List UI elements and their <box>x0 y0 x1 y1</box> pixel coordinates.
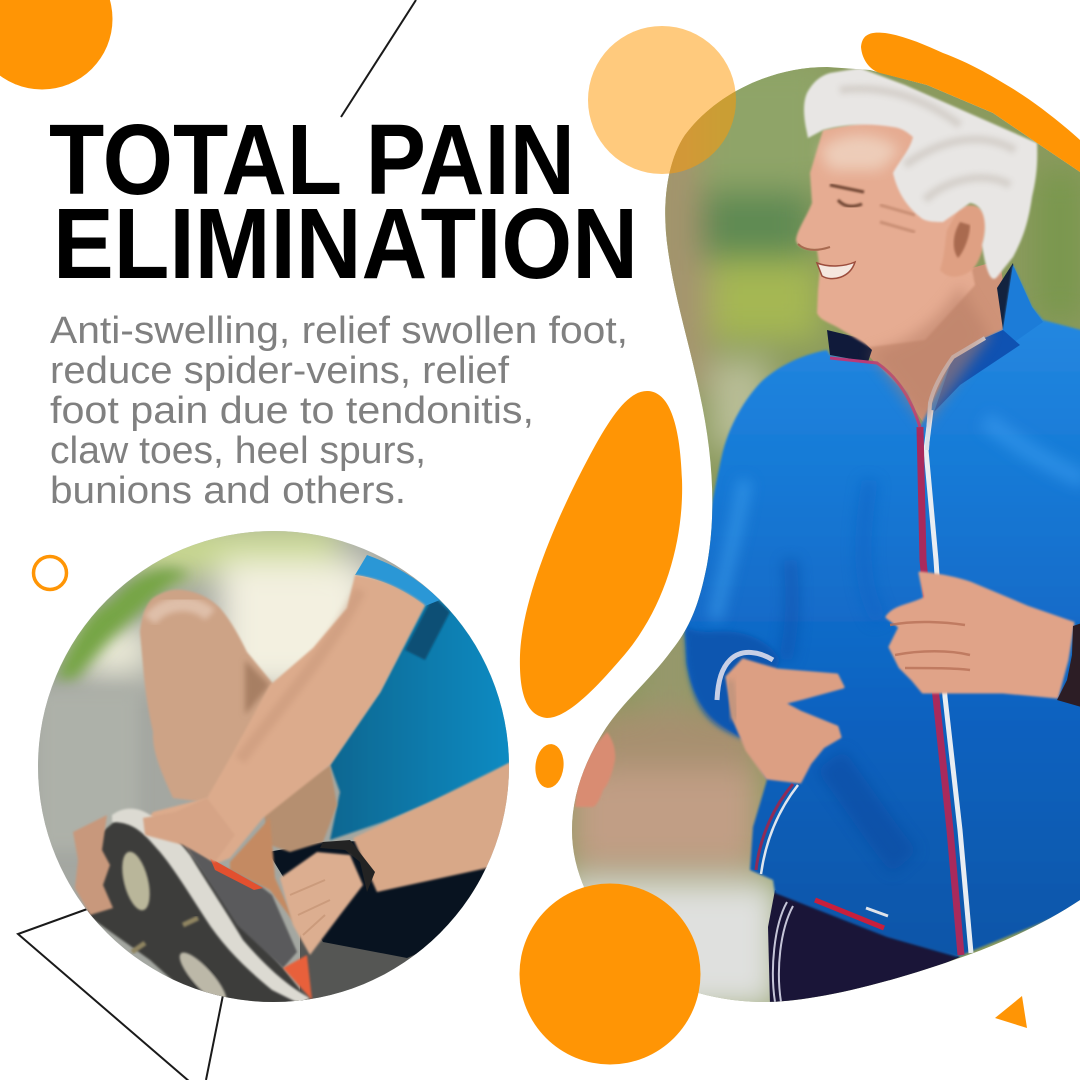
photo: smiling senior man jogging in blue jacket <box>560 50 1080 1010</box>
translucent peach circle <box>588 26 736 174</box>
title: TOTAL PAIN <box>49 104 575 216</box>
small ring <box>34 556 66 590</box>
sole lozenges <box>120 850 152 912</box>
white midsole <box>112 809 310 1004</box>
decorative orange circle top-left <box>0 0 112 90</box>
forearm <box>143 575 425 866</box>
neck <box>866 264 1003 422</box>
far hand <box>575 732 615 807</box>
shoe sole <box>87 817 312 1005</box>
jacket collar <box>946 265 1043 376</box>
body text: foot pain due to tendonitis, <box>50 390 534 432</box>
ankle <box>229 820 292 920</box>
body text: claw toes, heel spurs, <box>50 430 426 472</box>
watch <box>1057 622 1080 708</box>
left dark collar <box>827 330 872 362</box>
near hand <box>727 660 843 782</box>
jacket shadow folds <box>715 420 1080 862</box>
body text: reduce spider-veins, relief <box>50 350 509 392</box>
hand gripping ankle <box>280 852 363 955</box>
shoe side upper <box>183 842 297 968</box>
jacket body <box>685 265 1080 957</box>
eyes and brow <box>830 185 864 206</box>
small orange drop <box>533 743 566 789</box>
large orange drop <box>520 391 682 718</box>
inner dark collar right <box>997 263 1014 330</box>
body text <box>50 310 628 512</box>
jacket zipper <box>926 410 971 953</box>
hem stripes <box>756 784 793 870</box>
decorative thin line top <box>341 0 416 117</box>
sleeve <box>355 555 440 606</box>
head <box>796 115 975 347</box>
small orange triangle <box>995 996 1027 1028</box>
white hair <box>804 68 1037 279</box>
upper thigh leg <box>139 588 273 801</box>
red accents <box>210 858 263 890</box>
title <box>49 104 638 300</box>
decorative triangle outline bottom-left <box>18 908 223 1080</box>
body text: bunions and others. <box>50 470 406 512</box>
sleeve cuff <box>717 652 773 700</box>
raised hand <box>887 573 1073 697</box>
cheek shadow <box>870 285 990 425</box>
hand behind sole <box>73 815 113 915</box>
ear <box>940 205 987 277</box>
lower sleeve <box>685 627 780 738</box>
blurred park background <box>560 60 1080 1010</box>
photo: runner holding injured foot <box>30 520 520 1010</box>
orange swoosh top right <box>861 33 1080 172</box>
smile <box>817 262 855 279</box>
dark shorts <box>268 840 490 958</box>
right arm <box>353 760 515 892</box>
large orange circle bottom <box>520 884 700 1064</box>
under thigh <box>262 765 337 852</box>
title: ELIMINATION <box>53 188 638 300</box>
hand on foot: palm fingers <box>142 816 216 863</box>
body text: Anti-swelling, relief swollen foot, <box>50 310 628 352</box>
blurred park <box>80 525 370 690</box>
trousers <box>768 890 960 1005</box>
watch <box>320 840 375 892</box>
shirt <box>330 595 515 840</box>
